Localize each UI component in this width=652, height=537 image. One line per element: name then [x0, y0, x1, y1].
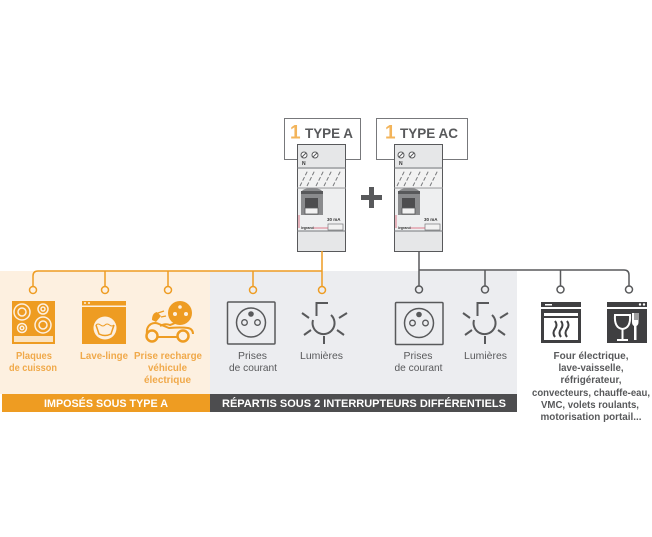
labels: grey devices: Prises [404, 350, 432, 362]
label: 1 type AC: TYPE AC [400, 125, 458, 141]
labels: orange devices: Lave-linge [80, 350, 128, 362]
label: 1 type AC [376, 118, 468, 160]
icon: cooktop [12, 301, 55, 344]
label: 1 type AC: 1 [385, 122, 396, 144]
labels: orange devices [9, 350, 202, 386]
text: other appliances: Four électrique, [554, 350, 629, 362]
icon: power socket 2 [396, 302, 443, 344]
breaker: type AC: 30 mA [424, 217, 438, 222]
icon: oven [541, 302, 581, 343]
breaker: type AC: N [399, 161, 403, 167]
text: other appliances: motorisation portail... [540, 411, 642, 423]
breaker: type A: 30 mA [327, 217, 341, 222]
bar: imposed under type A: IMPOSÉS SOUS TYPE A [44, 397, 168, 410]
plus sign [361, 187, 382, 208]
text: other appliances: lave-vaisselle, [558, 362, 624, 374]
breaker: type AC [394, 144, 443, 252]
bar: imposed under type A [2, 394, 210, 412]
labels: grey devices: Lumières [464, 350, 507, 362]
breaker: type A [297, 144, 346, 252]
icon: light bulb 1 [302, 303, 347, 344]
text: other appliances: réfrigérateur, [560, 374, 622, 386]
icon: dishwasher [607, 302, 647, 343]
label: 1 type A: 1 [290, 122, 301, 144]
labels: orange devices: électrique [144, 374, 191, 386]
icon: light bulb 2 [463, 303, 508, 344]
icon: power socket 1 [228, 302, 275, 344]
labels: grey devices: Prises [238, 350, 267, 362]
labels: grey devices [229, 350, 507, 374]
labels: grey devices: de courant [394, 362, 443, 374]
breaker: type A: N [302, 161, 306, 167]
bar: split across two differential switches: RÉPARTIS SOUS 2 INTERRUPTEURS DIFFÉRENTIELS [222, 397, 506, 410]
labels: grey devices: de courant [229, 362, 277, 374]
labels: orange devices: Plaques [16, 350, 52, 362]
breaker: type AC: legrand [398, 226, 411, 230]
grey connector tree [416, 251, 632, 293]
text: other appliances: VMC, volets roulants, [541, 399, 639, 411]
icon: washing machine [82, 301, 126, 344]
labels: orange devices: Prise recharge [134, 350, 202, 362]
orange connector tree [30, 251, 326, 294]
text: other appliances [532, 350, 650, 423]
label: 1 type A: TYPE A [305, 125, 353, 141]
panel: imposed under type A [0, 271, 210, 394]
icon: electric car charger [146, 301, 193, 342]
breaker: type A: legrand [301, 226, 314, 230]
labels: grey devices: Lumières [300, 350, 343, 362]
labels: orange devices: de cuisson [9, 362, 57, 374]
panel: split across two switches [210, 271, 517, 394]
label: 1 type A [284, 118, 360, 160]
labels: orange devices: véhicule [148, 362, 187, 374]
bar: split across two differential switches [210, 394, 517, 412]
